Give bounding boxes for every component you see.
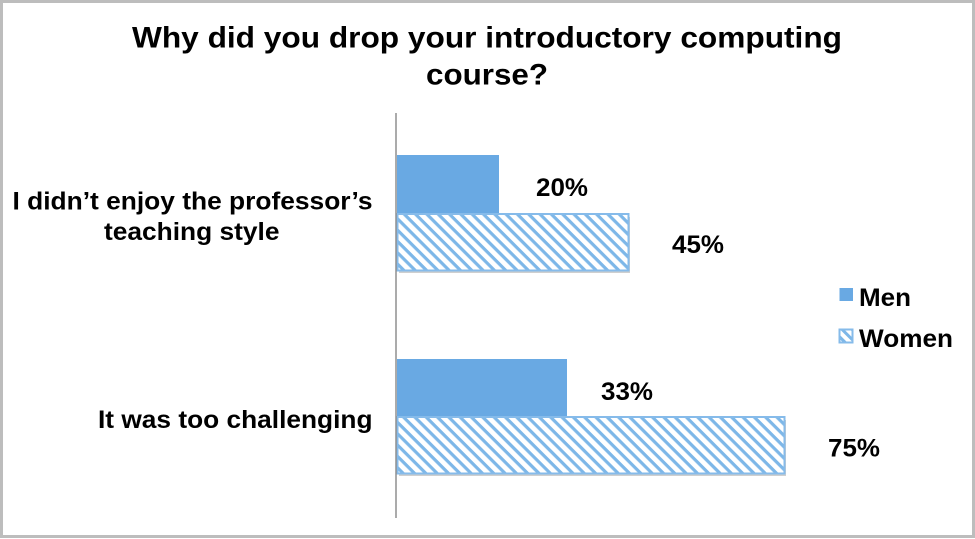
- value label: men 20%: 20%: [536, 174, 588, 202]
- category label: teaching style: I didn’t enjoy the professor’s: [12, 188, 372, 216]
- legend: [840, 284, 953, 353]
- legend label: men: Men: [859, 284, 911, 312]
- category label: teaching style: teaching style: [104, 218, 280, 246]
- legend label: women: Women: [859, 325, 953, 353]
- bar: men 20%: [397, 155, 499, 214]
- category label: teaching style: [12, 188, 372, 246]
- bar: women 75%: [398, 417, 786, 476]
- title: Why did you drop your introductory computing: [132, 22, 842, 54]
- bar: women 45%: [398, 214, 630, 273]
- bar: men 33%: [397, 359, 567, 417]
- legend swatch: women: [840, 330, 852, 342]
- value label: women 75%: 75%: [828, 434, 880, 462]
- value label: women 45%: 45%: [672, 231, 724, 259]
- vertical axis: [395, 113, 397, 518]
- title: course?: [426, 58, 548, 92]
- title: [132, 22, 842, 92]
- value label: men 33%: 33%: [601, 378, 653, 406]
- category label: too challenging: It was too challenging: [98, 406, 372, 434]
- legend swatch: men: [840, 288, 853, 301]
